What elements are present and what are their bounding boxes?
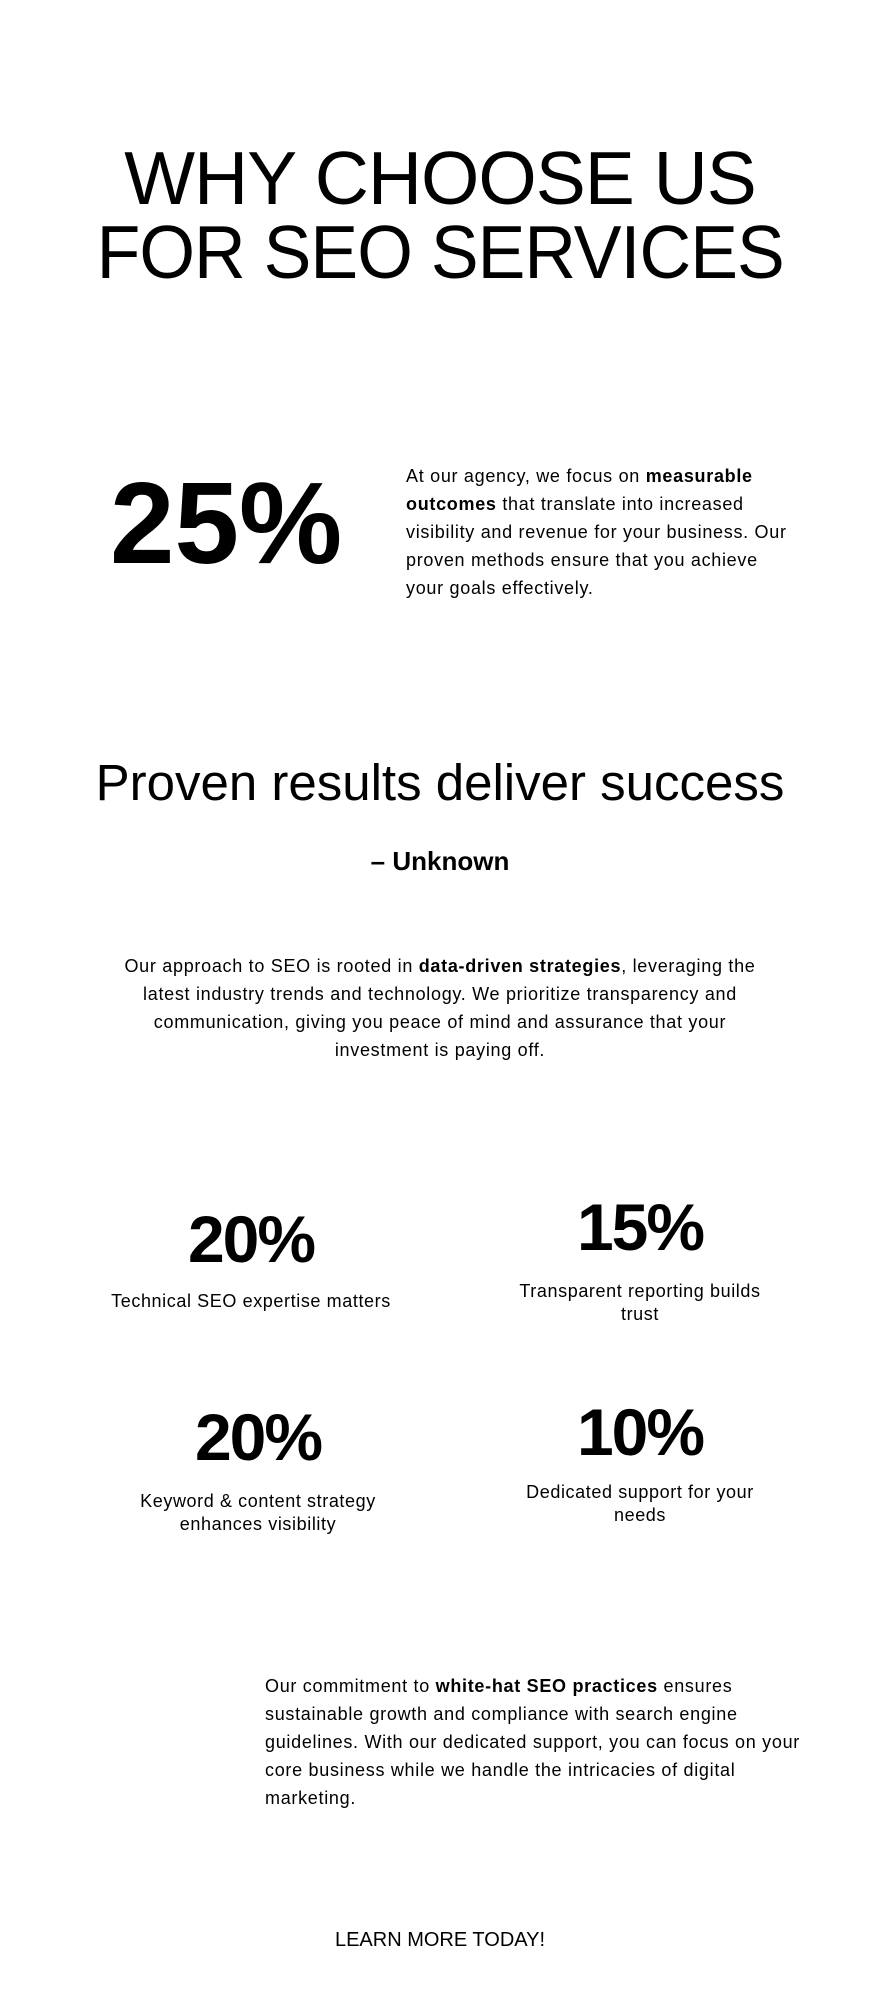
stat: transparent reporting: Transparent reporting builds trust — [519, 1281, 761, 1324]
quote attribution: – Unknown — [371, 846, 509, 876]
stat: transparent reporting — [519, 1190, 761, 1324]
intro text block: At our agency, we focus on measurable outcomes that translate into increased visibility and revenue for your business. Our proven methods ensure that you achieve your goals effectively. — [406, 466, 787, 598]
stat: transparent reporting: 15% — [577, 1190, 703, 1264]
title: FOR SEO SERVICES — [96, 210, 784, 294]
stat: keyword strategy: Keyword & content strategy enhances visibility — [140, 1491, 376, 1534]
stat: dedicated support — [526, 1395, 754, 1525]
stat: technical SEO — [111, 1202, 391, 1311]
call to action: LEARN MORE TODAY! — [335, 1929, 545, 1951]
stat: dedicated support: Dedicated support for your needs — [526, 1482, 754, 1525]
stat: keyword strategy — [140, 1400, 376, 1534]
stat: technical SEO: 20% — [188, 1202, 314, 1276]
quote: Proven results deliver success — [96, 754, 784, 811]
title: WHY CHOOSE US — [124, 136, 756, 220]
stat: technical SEO: Technical SEO expertise matters — [111, 1291, 391, 1311]
big stat 25%: 25% — [110, 458, 342, 588]
commitment text block: Our commitment to white-hat SEO practices ensures sustainable growth and compliance with search engine guidelines. With our dedicated support, you can focus on your core business while we handle the intricacies of digital marketing. — [265, 1676, 800, 1808]
title — [96, 136, 784, 294]
stat: keyword strategy: 20% — [195, 1400, 321, 1474]
approach text block: Our approach to SEO is rooted in data-driven strategies, leveraging the latest industry trends and technology. We prioritize transparency and communication, giving you peace of mind and assurance that your investment is paying off. — [124, 956, 756, 1060]
stat: dedicated support: 10% — [577, 1395, 703, 1469]
